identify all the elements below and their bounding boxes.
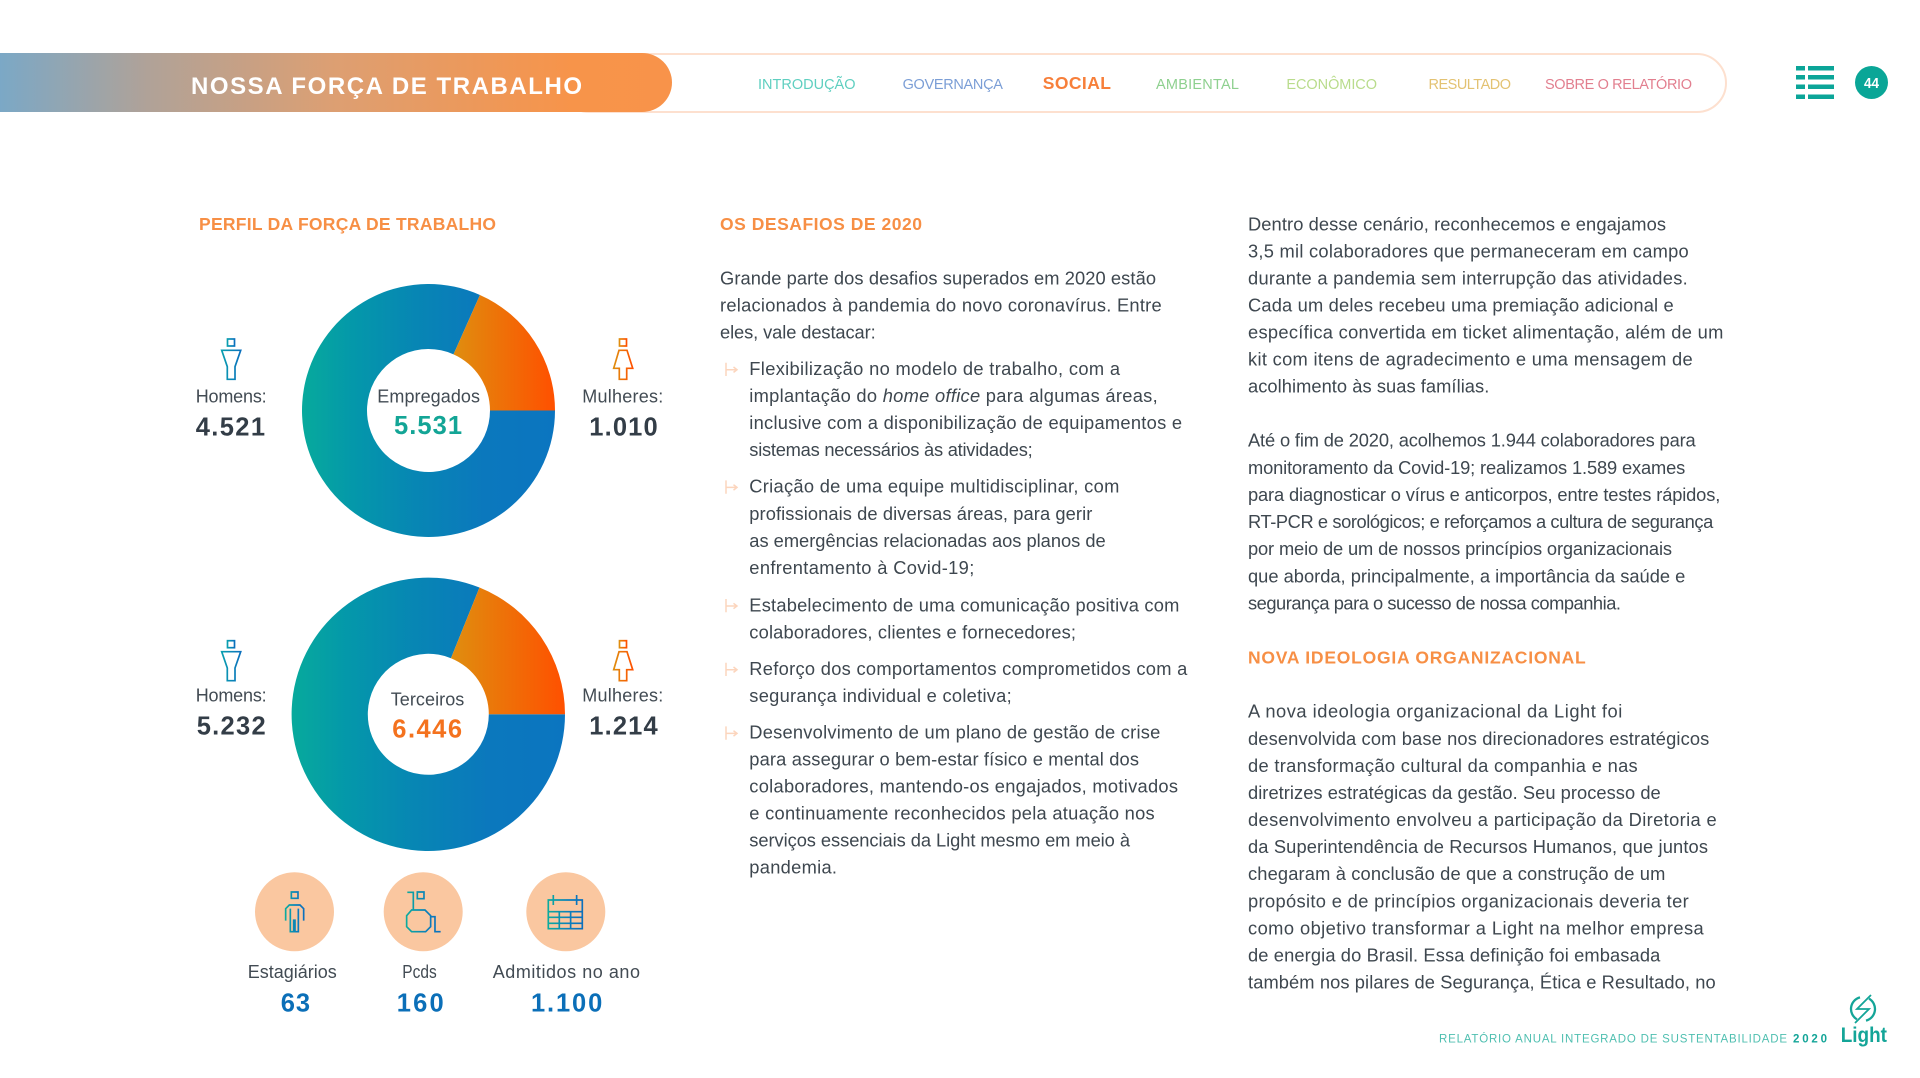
navigation pill outline [560, 54, 1726, 112]
text block: reconhecimento: durante a pandemia sem interrupção das atividades. [1248, 268, 1688, 289]
title: NOSSA FORÇA DE TRABALHO [191, 73, 582, 100]
stat: estagiários: Estagiários [248, 962, 337, 982]
text block: desafios intro [720, 267, 1162, 342]
text block: monitoramento covid: monitoramento da Covid-19; realizamos 1.589 exames [1248, 457, 1685, 478]
text block: nova ideologia: chegaram à conclusão de que a construção de um [1248, 863, 1665, 884]
icon: man [222, 339, 241, 379]
navigation menu: AMBIENTAL [1156, 77, 1239, 93]
text block: nova ideologia: da Superintendência de Recursos Humanos, que juntos [1248, 836, 1708, 857]
mulheres count: Mulheres: [582, 686, 663, 706]
icon: menu list [1796, 66, 1834, 99]
text block: reconhecimento: Dentro desse cenário, reconhecemos e engajamos [1248, 214, 1666, 235]
text block: desafios intro: eles, vale destacar: [720, 322, 876, 342]
stat: admitidos no ano: 1.100 [531, 990, 602, 1018]
navigation menu: SOCIAL [1043, 73, 1111, 93]
text block: reconhecimento: Cada um deles recebeu uma premiação adicional e [1248, 295, 1674, 316]
icon: bolt in circle [1851, 995, 1875, 1023]
donut chart: empregados [302, 284, 555, 537]
icon: bullet arrows [726, 363, 737, 740]
empregados total: Empregados [377, 386, 480, 406]
text block: nova ideologia: de energia do Brasil. Essa definição foi embasada [1248, 944, 1661, 965]
text block: nova ideologia: desenvolvimento envolveu a participação da Diretoria e [1248, 809, 1717, 830]
icon: calendar [548, 895, 582, 929]
empregados total [377, 386, 480, 440]
navigation menu: GOVERNANÇA [903, 77, 1003, 93]
homens count: 4.521 [196, 414, 265, 442]
stat: pcds [384, 872, 463, 1018]
logo: light [1841, 995, 1887, 1047]
navigation menu: SOBRE O RELATÓRIO [1545, 76, 1692, 93]
mulheres count: 1.214 [589, 712, 659, 740]
item: gestão de crise: colaboradores, mantendo-os engajados, motivados [749, 776, 1178, 797]
item: comunicação positiva: Estabelecimento de uma comunicação positiva com [749, 594, 1179, 615]
terceiros total: 6.446 [392, 716, 462, 744]
terceiros total: Terceiros [391, 690, 464, 710]
homens count: Homens: [196, 386, 267, 406]
text block: nova ideologia: desenvolvida com base nos direcionadores estratégicos [1248, 728, 1709, 749]
item: equipe multidisciplinar: enfrentamento à Covid-19; [749, 557, 974, 578]
stat: admitidos no ano: Admitidos no ano [493, 962, 640, 982]
text block: nova ideologia: propósito e de princípios organizacionais deveria ter [1248, 890, 1689, 911]
icon: man [222, 641, 241, 681]
stat: pcds: 160 [397, 990, 444, 1018]
logo: light: Light [1841, 1024, 1887, 1047]
mulheres count [582, 386, 663, 442]
text block: monitoramento covid: segurança para o sucesso de nossa companhia. [1248, 592, 1621, 613]
heading: os desafios de 2020: OS DESAFIOS DE 2020 [720, 214, 922, 234]
stat: estagiários: 63 [281, 990, 310, 1018]
text block: desafios intro: relacionados à pandemia do novo coronavírus. Entre [720, 294, 1162, 316]
homens count: Homens: [196, 686, 267, 706]
item: comunicação positiva [749, 594, 1179, 642]
icon: woman [614, 339, 633, 379]
item: equipe multidisciplinar: as emergências relacionadas aos planos de [749, 530, 1106, 551]
item: gestão de crise: Desenvolvimento de um plano de gestão de crise [749, 722, 1160, 743]
item: comportamentos: Reforço dos comportamentos comprometidos com a [749, 658, 1188, 679]
navigation menu: RESULTADO [1428, 77, 1511, 93]
item: flexibilização: implantação do home office para algumas áreas, [749, 385, 1158, 406]
navigation menu: ECONÔMICO [1286, 76, 1377, 93]
item: comportamentos [749, 658, 1188, 706]
stat: pcds: Pcds [402, 962, 437, 982]
navigation menu: INTRODUÇÃO [758, 76, 856, 93]
header title bar [0, 53, 672, 112]
text block: nova ideologia: diretrizes estratégicas da gestão. Seu processo de [1248, 782, 1661, 803]
heading: perfil da força de trabalho: PERFIL DA FORÇA DE TRABALHO [199, 214, 496, 234]
text block: reconhecimento: acolhimento às suas famílias. [1248, 376, 1489, 397]
navigation menu [758, 73, 1692, 93]
mulheres count [582, 686, 663, 740]
text block: monitoramento covid: por meio de um de nossos princípios organizacionais [1248, 538, 1672, 559]
item: flexibilização [749, 358, 1182, 460]
stat: estagiários [248, 872, 337, 1018]
homens count [196, 686, 267, 740]
text block: monitoramento covid: que aborda, principalmente, a importância da saúde e [1248, 565, 1685, 586]
item: gestão de crise: serviços essenciais da Light mesmo em meio à [749, 830, 1131, 851]
heading: nova ideologia organizacional: NOVA IDEOLOGIA ORGANIZACIONAL [1248, 647, 1586, 667]
panel: terceiros donut [196, 578, 663, 851]
text block: desafios intro: Grande parte dos desafios superados em 2020 estão [720, 267, 1156, 288]
terceiros total [391, 690, 464, 744]
icon: woman [614, 641, 633, 681]
mulheres count: Mulheres: [582, 386, 663, 406]
page number badge [1855, 66, 1888, 99]
text block: monitoramento covid [1248, 430, 1720, 613]
text block: nova ideologia: também nos pilares de Segurança, Ética e Resultado, no [1248, 971, 1716, 992]
homens count [196, 386, 267, 442]
text block: reconhecimento [1248, 214, 1723, 397]
item: flexibilização: Flexibilização no modelo de trabalho, com a [749, 358, 1121, 379]
item: equipe multidisciplinar: Criação de uma equipe multidisciplinar, com [749, 476, 1119, 497]
bullet list: desafios [726, 358, 1188, 878]
item: comportamentos: segurança individual e coletiva; [749, 685, 1012, 706]
text block: reconhecimento: específica convertida em ticket alimentação, além de um [1248, 322, 1723, 343]
item: comunicação positiva: colaboradores, clientes e fornecedores; [749, 621, 1076, 642]
text block: reconhecimento: kit com itens de agradecimento e uma mensagem de [1248, 349, 1693, 370]
page number badge: 44 [1864, 75, 1880, 92]
item: flexibilização: sistemas necessários às atividades; [749, 439, 1033, 460]
item: equipe multidisciplinar [749, 476, 1119, 578]
item: gestão de crise [749, 722, 1178, 878]
panel: empregados donut [196, 284, 663, 537]
item: gestão de crise: e continuamente reconhecidos pela atuação nos [749, 803, 1155, 824]
text block: nova ideologia [1248, 701, 1717, 992]
empregados total: 5.531 [394, 412, 462, 440]
stat: admitidos no ano [493, 872, 640, 1018]
icon: intern [286, 892, 304, 932]
footer text: RELATÓRIO ANUAL INTEGRADO DE SUSTENTABILIDADE [1439, 1033, 1787, 1046]
donut chart: terceiros [292, 578, 565, 851]
icon: wheelchair [407, 892, 441, 932]
item: gestão de crise: pandemia. [749, 857, 837, 878]
text block: reconhecimento: 3,5 mil colaboradores que permaneceram em campo [1248, 241, 1689, 262]
text block: monitoramento covid: RT-PCR e sorológicos; e reforçamos a cultura de segurança [1248, 511, 1714, 532]
homens count: 5.232 [197, 712, 266, 740]
text block: nova ideologia: A nova ideologia organizacional da Light foi [1248, 701, 1622, 722]
text block: monitoramento covid: para diagnosticar o vírus e anticorpos, entre testes rápidos, [1248, 484, 1720, 505]
text block: monitoramento covid: Até o fim de 2020, acolhemos 1.944 colaboradores para [1248, 430, 1697, 451]
text block: nova ideologia: de transformação cultural da companhia e nas [1248, 755, 1638, 776]
item: equipe multidisciplinar: profissionais de diversas áreas, para gerir [749, 503, 1092, 524]
item: flexibilização: inclusive com a disponibilização de equipamentos e [749, 412, 1182, 433]
footer text: 2020 [1793, 1034, 1827, 1046]
mulheres count: 1.010 [589, 414, 658, 442]
text block: nova ideologia: como objetivo transformar a Light na melhor empresa [1248, 917, 1705, 938]
item: gestão de crise: para assegurar o bem-estar físico e mental dos [749, 749, 1139, 770]
